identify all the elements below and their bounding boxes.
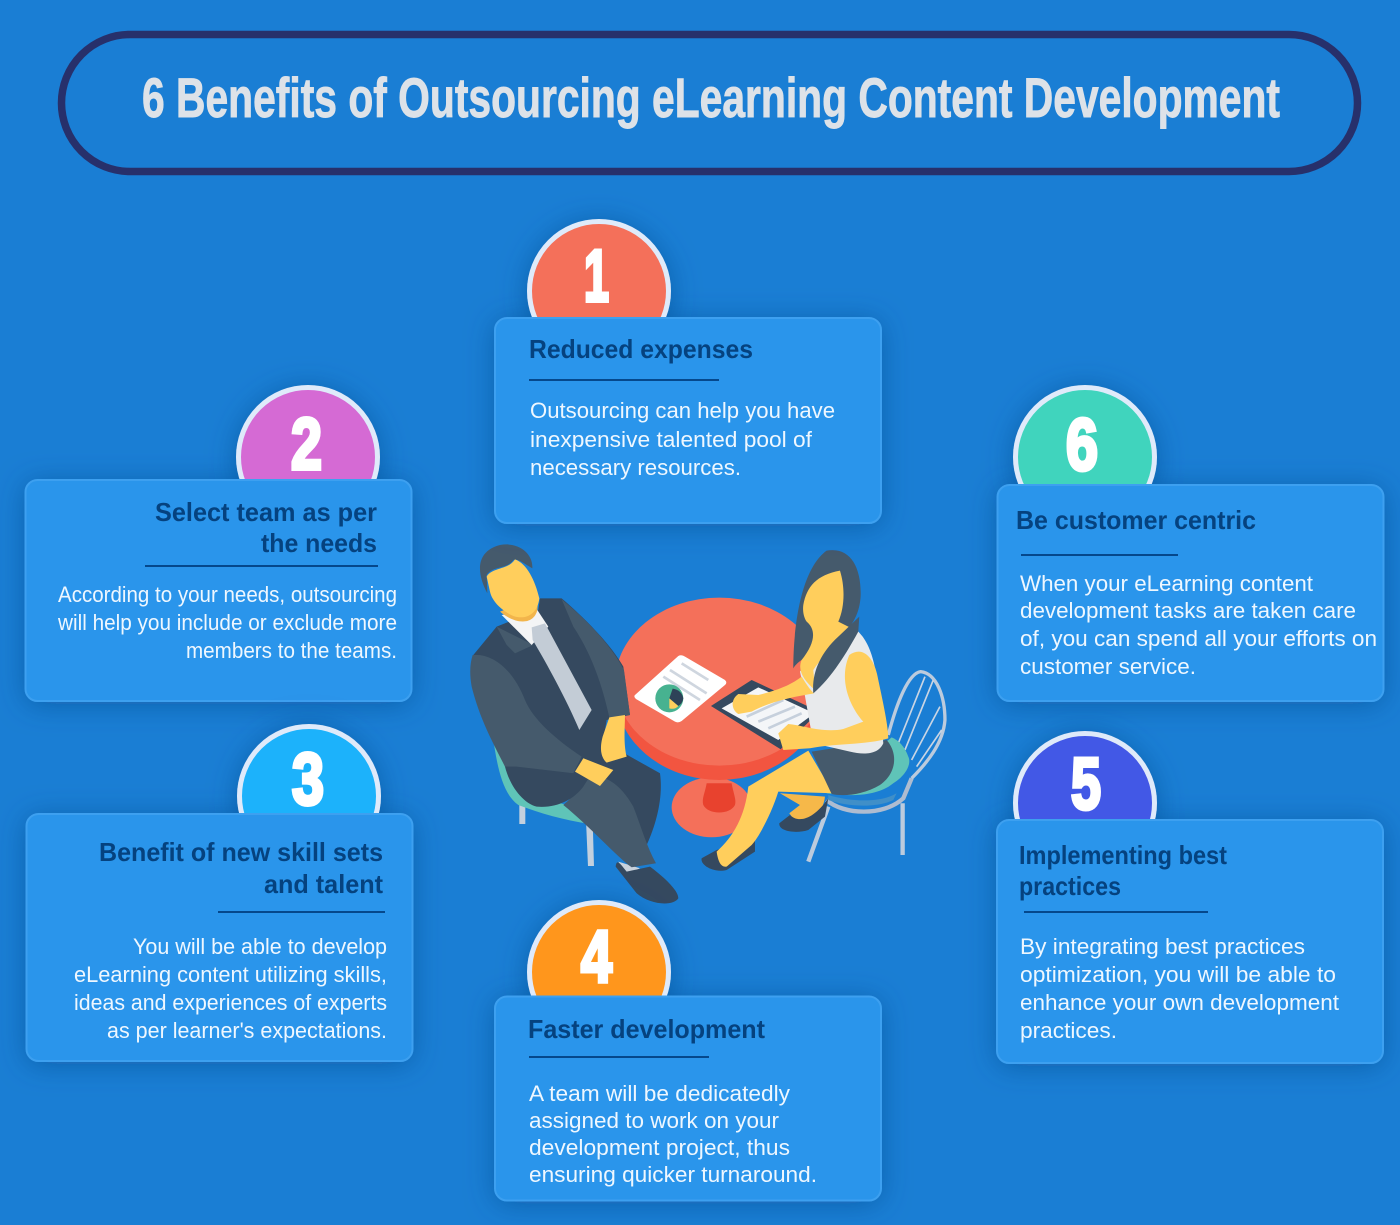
arm upper [733, 677, 814, 714]
body 5: optimization, you will be able to [1020, 962, 1336, 987]
benefit 1 [495, 222, 881, 523]
body 4: assigned to work on your [529, 1108, 779, 1133]
illustration: two people meeting at a table [470, 544, 945, 904]
benefit 6 [998, 388, 1384, 701]
hair strand [813, 617, 859, 693]
heading 5 [1019, 840, 1227, 901]
heading 3: Benefit of new skill sets [99, 837, 383, 867]
heading 2: the needs [261, 528, 377, 558]
rule 5 [1024, 911, 1208, 913]
heading 3 [99, 837, 383, 899]
hair [480, 544, 532, 593]
rule 1 [529, 379, 719, 381]
number badge 3: 3 [292, 739, 324, 820]
number badge 1: 1 [584, 236, 609, 317]
number badge 4 [530, 902, 668, 1042]
body 4: A team will be dedicatedly [529, 1081, 790, 1106]
benefit 2 [26, 388, 412, 701]
rule 6 [1021, 554, 1178, 556]
body 2 [57, 582, 397, 663]
face [487, 559, 539, 617]
body 1: Outsourcing can help you have [530, 398, 835, 423]
body 4: ensuring quicker turnaround. [529, 1162, 817, 1187]
sleeve [470, 655, 582, 773]
body 6: When your eLearning content [1020, 571, 1313, 596]
benefit 3 [26, 726, 412, 1061]
leg [717, 751, 833, 867]
title banner [62, 34, 1358, 172]
rule 4 [529, 1056, 709, 1058]
document with pie chart [634, 655, 726, 722]
number badge 5: 5 [1071, 744, 1101, 825]
heading 3: and talent [264, 869, 383, 899]
body 3: eLearning content utilizing skills, [74, 962, 387, 987]
body 4: development project, thus [529, 1135, 790, 1160]
near leg [563, 776, 656, 867]
benefit 4 [495, 902, 881, 1200]
number badge 5 [1016, 734, 1154, 872]
body 3 [74, 934, 387, 1043]
tablet [711, 680, 819, 749]
heading 5: Implementing best [1019, 840, 1227, 870]
number badge 3 [240, 726, 378, 866]
lapel [497, 627, 533, 653]
woman's chair [808, 672, 945, 862]
number badge 4: 4 [581, 917, 612, 998]
right chest panel [562, 599, 630, 717]
sock and shoe [618, 862, 640, 875]
heading 2: Select team as per [155, 497, 377, 527]
body 6: development tasks are taken care [1020, 598, 1356, 623]
table base [672, 777, 752, 837]
body 6: of, you can spend all your efforts on [1020, 626, 1377, 651]
tie [532, 623, 592, 730]
card 4 [495, 996, 881, 1200]
card 3 [26, 814, 412, 1061]
body 2: According to your needs, outsourcing [58, 582, 397, 607]
woman [701, 550, 894, 871]
body 1: necessary resources. [530, 455, 741, 480]
body 5: practices. [1020, 1018, 1117, 1043]
man's chair [493, 735, 594, 866]
number badge 2 [238, 388, 378, 526]
heading 2 [155, 497, 377, 558]
card 2 [26, 480, 412, 701]
body 5: enhance your own development [1020, 990, 1339, 1015]
rule 3 [218, 911, 385, 913]
back hair [793, 550, 861, 668]
body 6: customer service. [1020, 654, 1196, 679]
number badge 6: 6 [1066, 405, 1098, 486]
card shadow 3 [26, 814, 412, 1061]
heading 6: Be customer centric [1016, 505, 1256, 535]
table top [615, 598, 823, 780]
card 6 [998, 485, 1384, 701]
benefit 5 [997, 734, 1383, 1063]
rule 2 [145, 565, 378, 567]
card 1 [495, 318, 881, 523]
body 3: as per learner's expectations. [107, 1018, 387, 1043]
body 1 [530, 398, 835, 480]
top [800, 628, 883, 754]
body 2: members to the teams. [186, 638, 397, 663]
heading 4: Faster development [528, 1014, 765, 1044]
body 1: inexpensive talented pool of [530, 427, 813, 452]
body 3: You will be able to develop [133, 934, 387, 959]
heading 5: practices [1019, 871, 1121, 901]
skirt [812, 740, 894, 795]
face and neck [800, 571, 855, 690]
card 5 [997, 820, 1383, 1063]
card shadow 6 [998, 485, 1384, 701]
card shadow 2 [26, 480, 412, 701]
card shadow 5 [997, 820, 1383, 1063]
number badge 6 [1016, 388, 1154, 526]
jacket [473, 598, 630, 807]
body 5 [1020, 934, 1339, 1043]
number badge 1 [530, 222, 668, 360]
body 5: By integrating best practices [1020, 934, 1305, 959]
man [470, 544, 678, 904]
hands [601, 715, 627, 763]
body 2: will help you include or exclude more [57, 610, 397, 635]
card shadow 4 [495, 996, 881, 1200]
shirt [502, 610, 548, 645]
heading 1: Reduced expenses [529, 334, 753, 364]
far leg and shoe [780, 793, 825, 823]
arm lower [778, 652, 888, 750]
body 4 [529, 1081, 817, 1187]
near shoe [701, 838, 755, 871]
number badge 2: 2 [291, 404, 322, 485]
card shadow 1 [495, 318, 881, 523]
body 6 [1020, 571, 1377, 679]
body 3: ideas and experiences of experts [74, 990, 387, 1015]
neck [500, 597, 538, 621]
far leg [573, 743, 661, 845]
